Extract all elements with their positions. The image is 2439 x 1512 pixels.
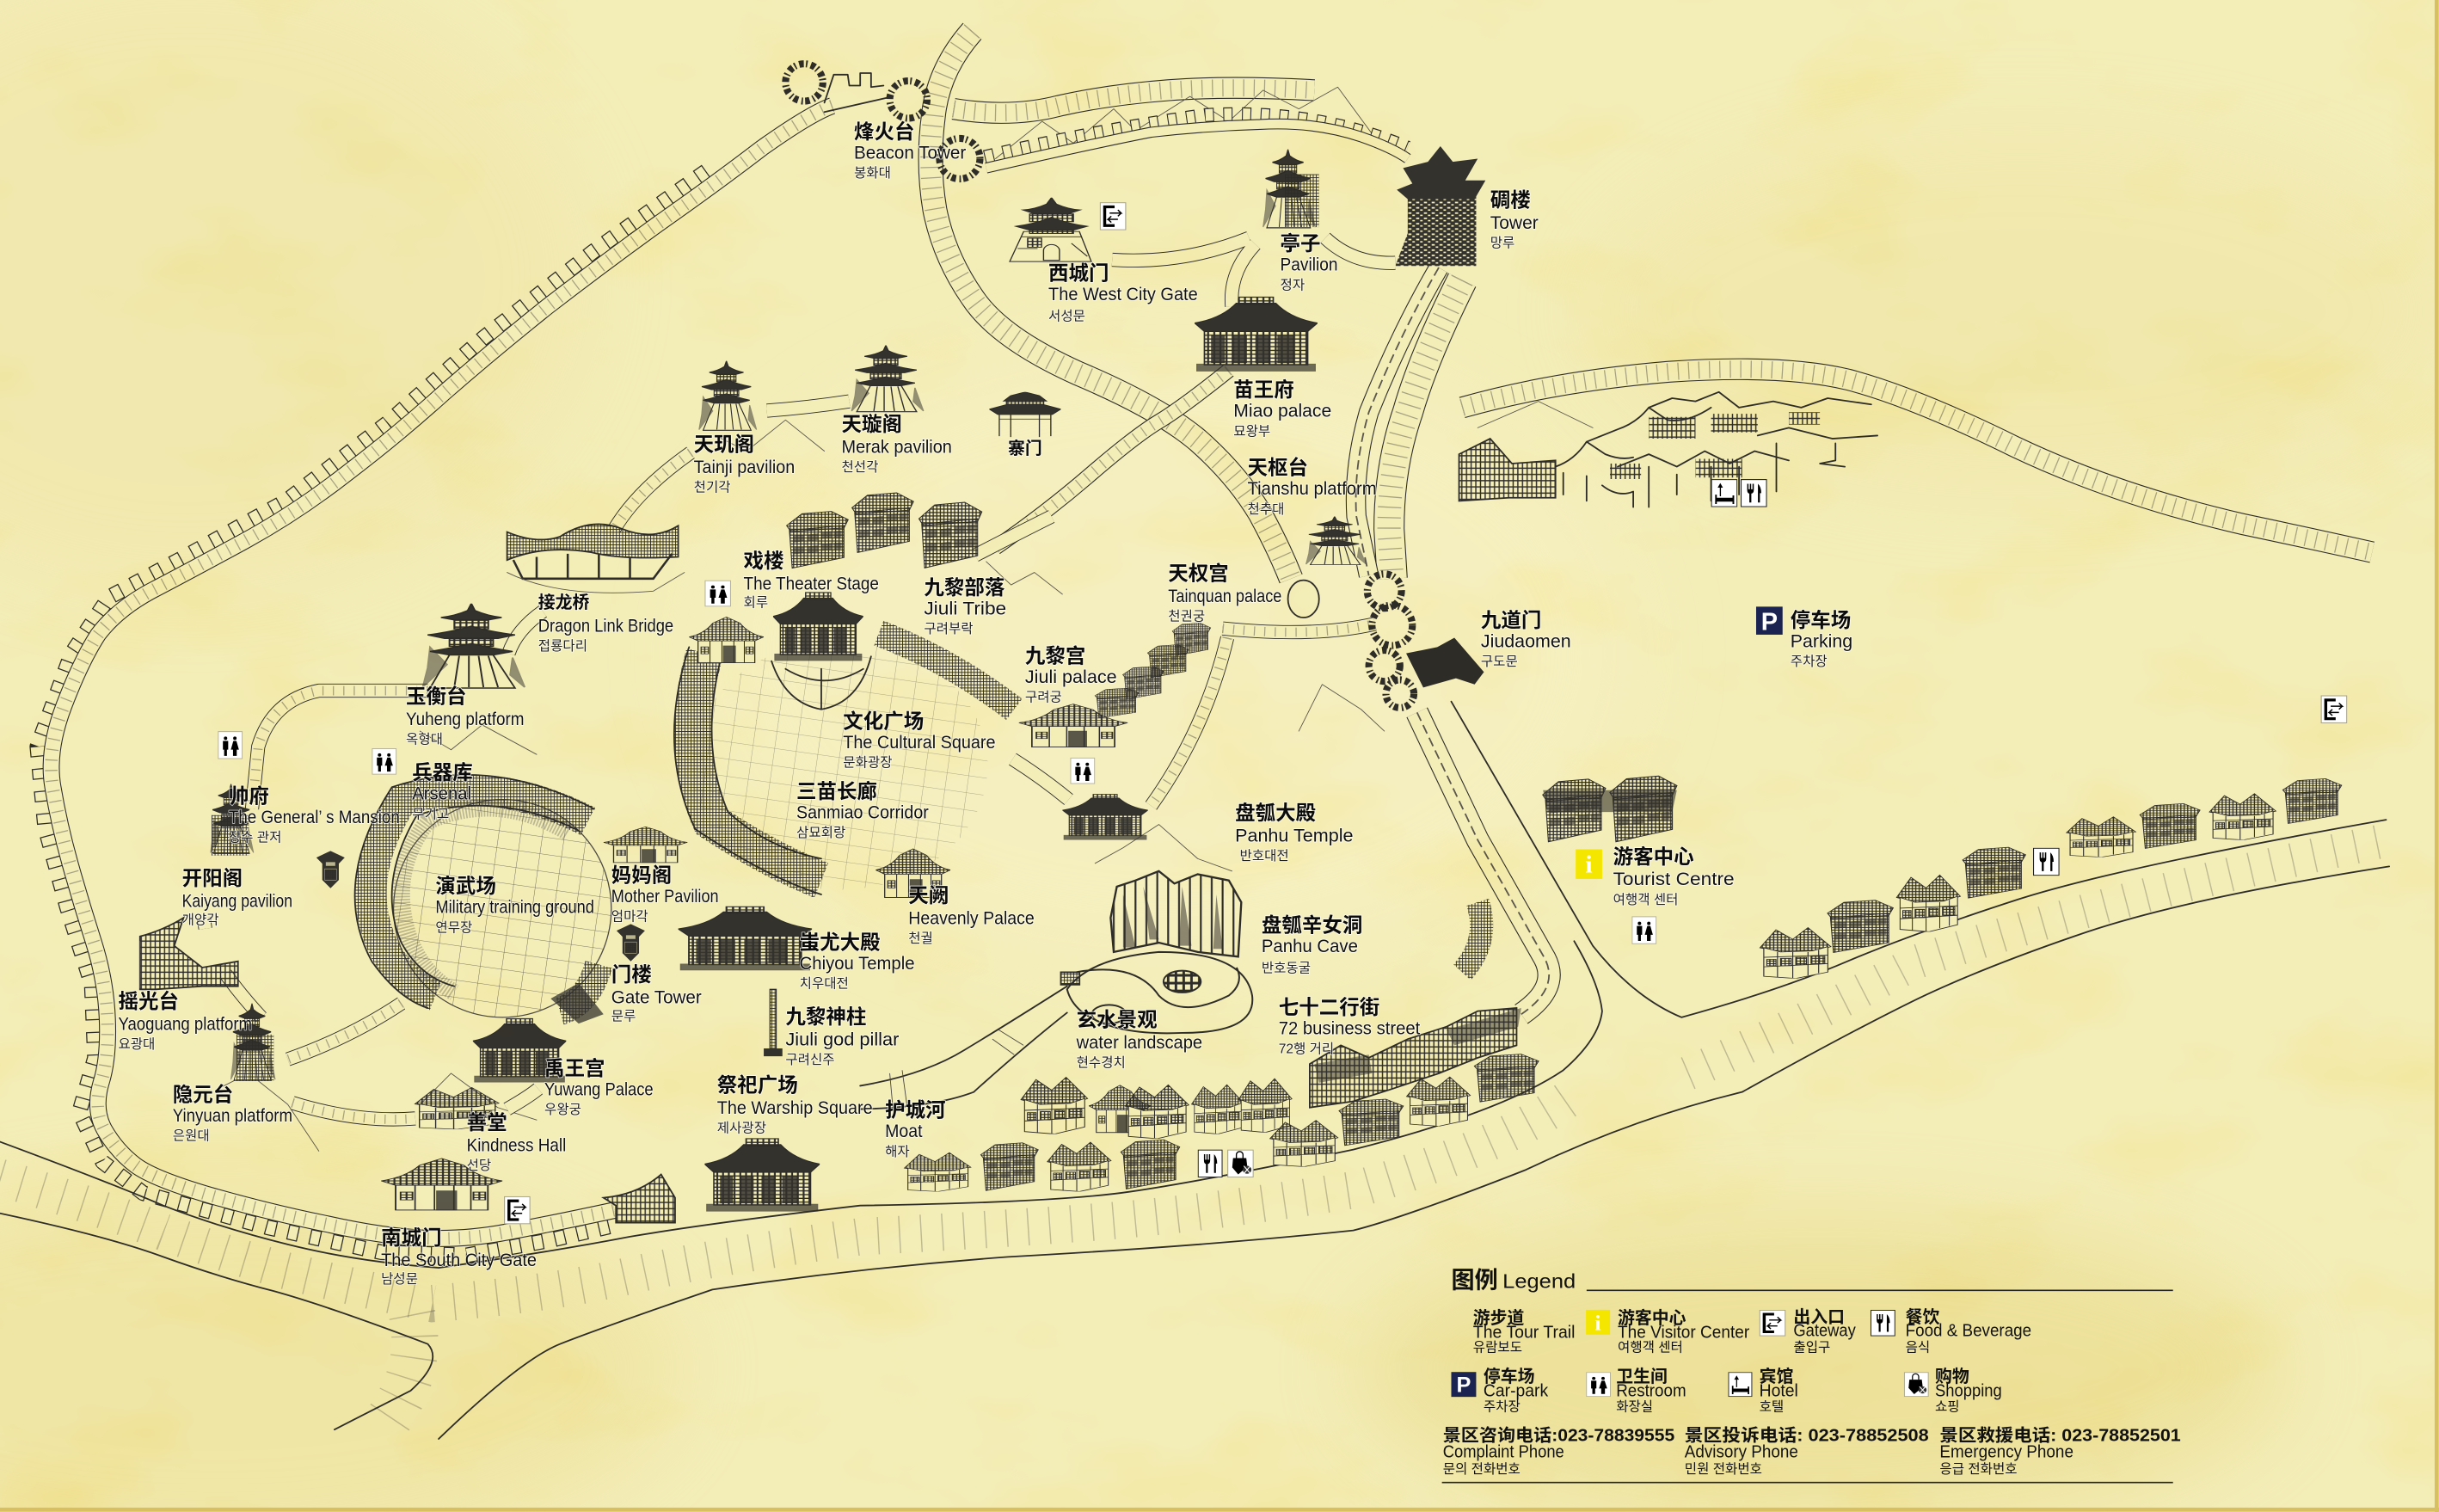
label: miao palace: 묘왕부 xyxy=(1233,423,1270,439)
east road xyxy=(1462,369,2372,552)
label: warship square xyxy=(717,1074,873,1136)
label: heavenly palace: 천궐 xyxy=(908,931,933,946)
label: jiudaomen xyxy=(1481,609,1571,669)
label: dragon link bridge: 접룡다리 xyxy=(538,638,587,654)
label: arsenal: 무기고 xyxy=(412,806,449,821)
building: dragon link bridge xyxy=(507,524,685,593)
legend: food and beverage: Food & Beverage xyxy=(1906,1322,2031,1341)
icon: restroom general's mansion xyxy=(218,732,243,759)
icon: parking: P xyxy=(1761,609,1778,636)
legend: car park: 停车场 xyxy=(1484,1367,1535,1386)
building: pavilion xyxy=(1263,150,1319,228)
label: military training ground: 演武场 xyxy=(435,875,496,897)
label: tower: 碉楼 xyxy=(1490,189,1531,212)
label: yaoguang platform: 요광대 xyxy=(118,1036,155,1052)
label: jiudaomen: Jiudaomen xyxy=(1481,631,1571,651)
building: west city gate xyxy=(1010,198,1091,261)
legend: gateway: Gateway xyxy=(1793,1322,1856,1341)
label: general's mansion: 장수 관저 xyxy=(229,829,281,845)
label: yuwang palace xyxy=(544,1057,654,1117)
label: yuheng platform xyxy=(406,685,525,747)
label: jiuli god pillar: Jiuli god pillar xyxy=(785,1030,899,1049)
jiudaomen tree cluster xyxy=(1367,574,1484,708)
phone: complaint: 문의 전화번호 xyxy=(1443,1461,1521,1477)
legend: food and beverage: 餐饮 xyxy=(1906,1308,1940,1327)
village sketch xyxy=(1478,392,1877,507)
label: military training ground: Military training ground xyxy=(435,898,594,918)
label: cultural square: 문화광장 xyxy=(843,755,893,771)
label: jiuli god pillar: 구려신주 xyxy=(785,1052,835,1067)
label: jiuli tribe xyxy=(924,576,1006,636)
label: tower: 망루 xyxy=(1490,236,1514,251)
building: yuwang palace xyxy=(473,1018,566,1082)
icon: food moat xyxy=(1198,1150,1222,1177)
arc building xyxy=(1462,902,1482,972)
label: tainji pavilion: Tainji pavilion xyxy=(694,458,795,477)
label: military training ground: 연무장 xyxy=(435,919,472,935)
label: kaiyang pavilion: 开阳阁 xyxy=(182,867,243,889)
building: mother pavilion xyxy=(604,827,687,863)
label: warship square: The Warship Square xyxy=(717,1098,873,1118)
mountains behind north wall xyxy=(218,87,1385,1151)
training ground steps xyxy=(402,808,568,993)
label: tainquan palace: Tainquan palace xyxy=(1168,587,1281,606)
phone: complaint xyxy=(1443,1426,1674,1477)
label: pavilion xyxy=(1281,231,1337,292)
label: west city gate xyxy=(1048,261,1198,324)
label: merak pavilion: Merak pavilion xyxy=(841,437,952,457)
military training ground xyxy=(394,800,611,1017)
label: heavenly palace xyxy=(908,884,1035,946)
label: yinyuan platform xyxy=(173,1083,292,1144)
label: mother pavilion: Mother Pavilion xyxy=(611,887,719,907)
pond pavilion xyxy=(1061,972,1079,985)
label: tainquan palace xyxy=(1168,562,1281,624)
label: tianshu platform xyxy=(1248,456,1377,517)
icon: food village xyxy=(1741,480,1766,507)
label: sanmiao corridor: 三苗长廊 xyxy=(796,780,877,802)
building: fortified tower xyxy=(1395,146,1485,266)
label: panhu temple: Panhu Temple xyxy=(1235,826,1354,845)
icon: visitor information: i xyxy=(1586,851,1593,879)
label: jiuli tribe: Jiuli Tribe xyxy=(924,599,1006,618)
label: arsenal xyxy=(412,761,473,821)
house row three xyxy=(1270,1054,1539,1166)
house row two xyxy=(905,1140,1180,1191)
label: gate tower: Gate Tower xyxy=(611,988,702,1008)
label: kindness hall: 선당 xyxy=(467,1158,491,1173)
label: yinyuan platform: 은원대 xyxy=(173,1128,210,1144)
label: merak pavilion: 천선각 xyxy=(841,459,878,475)
label: panhu temple: 盘瓠大殿 xyxy=(1235,802,1316,824)
label: parking: 주차장 xyxy=(1791,654,1828,669)
label: water landscape: water landscape xyxy=(1076,1033,1202,1053)
legend heading: 图例 xyxy=(1451,1267,1498,1294)
legend: visitor center: The Visitor Center xyxy=(1618,1323,1750,1342)
label: chiyou temple xyxy=(800,931,915,991)
seventy-two business street xyxy=(1310,1008,1521,1108)
corridor ring right arc xyxy=(879,633,1014,710)
label: dragon link bridge: 接龙桥 xyxy=(538,593,590,612)
label: water landscape xyxy=(1076,1009,1202,1071)
label: 72 business street: 72 business street xyxy=(1279,1019,1420,1039)
legend: restroom: Restroom xyxy=(1616,1381,1686,1400)
phone: advisory: 景区投诉电话: 023-78852508 xyxy=(1685,1427,1929,1446)
label: tainquan palace: 天权宫 xyxy=(1168,562,1229,585)
label: moat xyxy=(885,1098,946,1159)
icon: visitor information xyxy=(1576,850,1602,879)
building: kaiyang pavilion xyxy=(140,918,238,989)
label: gate tower: 문루 xyxy=(611,1009,636,1023)
corridor ring left outlines xyxy=(674,647,821,894)
label: water landscape: 현수경치 xyxy=(1077,1055,1126,1071)
label: yuheng platform: Yuheng platform xyxy=(406,710,525,729)
label: dragon link bridge: Dragon Link Bridge xyxy=(538,616,673,636)
east house row xyxy=(1760,778,2342,979)
label: tourist centre: Tourist Centre xyxy=(1613,870,1735,889)
phone: emergency: 응급 전화번호 xyxy=(1939,1461,2018,1477)
label: moat: Moat xyxy=(885,1122,923,1141)
house row one xyxy=(1021,1078,1292,1139)
label: miao palace xyxy=(1233,378,1331,439)
building: kindness hall xyxy=(415,1087,499,1129)
label: moat: 护城河 xyxy=(885,1098,946,1122)
label: west city gate: 西城门 xyxy=(1048,261,1109,285)
label: tianshu platform: Tianshu platform xyxy=(1248,479,1377,499)
label: parking: Parking xyxy=(1791,631,1852,651)
legend: visitor center: 游客中心 xyxy=(1618,1308,1686,1328)
icon: shopping moat xyxy=(1228,1150,1253,1177)
icon: gateway west xyxy=(1100,203,1126,230)
building: south side hall xyxy=(381,1159,502,1210)
legend: tour trail xyxy=(1473,1308,1575,1355)
label: yuwang palace: 禹王宫 xyxy=(544,1057,605,1079)
label: kaiyang pavilion: 개양각 xyxy=(182,912,219,927)
building: yuheng platform xyxy=(423,604,525,688)
legend: restroom: 卫生间 xyxy=(1616,1368,1668,1386)
turret near gate tower xyxy=(617,924,645,962)
building: jiuli palace steps xyxy=(1095,623,1211,718)
legend: gateway xyxy=(1760,1308,1856,1355)
phone: emergency: Emergency Phone xyxy=(1939,1443,2073,1462)
label: sanmiao corridor xyxy=(796,780,929,840)
label: cultural square: The Cultural Square xyxy=(843,733,996,753)
jiuli god pillar xyxy=(764,989,783,1056)
tianshu platform pagoda xyxy=(1306,516,1366,565)
northwest and south city wall xyxy=(37,106,832,1256)
label: dragon link bridge xyxy=(538,593,673,654)
label: jiuli palace: 九黎宫 xyxy=(1025,644,1085,667)
building: miao palace xyxy=(1195,297,1318,371)
label: beacon tower: 烽火台 xyxy=(854,120,914,143)
label: parking xyxy=(1791,609,1852,669)
label: yuheng platform: 玉衡台 xyxy=(406,685,467,708)
label: parking: 停车场 xyxy=(1791,609,1851,631)
label: pavilion: 정자 xyxy=(1281,277,1305,292)
label: tianshu platform: 天枢台 xyxy=(1248,456,1308,479)
label: kindness hall: Kindness Hall xyxy=(467,1135,566,1155)
label: merak pavilion: 天璇阁 xyxy=(841,413,902,435)
phone: complaint: Complaint Phone xyxy=(1443,1443,1564,1462)
building: jiuli palace base xyxy=(1019,704,1127,747)
legend: food and beverage xyxy=(1871,1308,2031,1355)
label: south city gate: 남성문 xyxy=(381,1271,418,1287)
label: theater stage: 회루 xyxy=(744,594,768,610)
icon: restroom jiuli palace xyxy=(1071,758,1095,784)
beacon wall segment xyxy=(825,73,893,112)
label: chiyou temple: Chiyou Temple xyxy=(800,954,914,974)
label: jiudaomen: 구도문 xyxy=(1481,655,1518,669)
label: kaiyang pavilion: Kaiyang pavilion xyxy=(182,891,292,911)
legend: car park: Car-park xyxy=(1484,1381,1548,1400)
building: gate tower xyxy=(550,964,604,1023)
label: tainji pavilion xyxy=(694,433,795,495)
phone: emergency: 景区救援电话: 023-78852501 xyxy=(1939,1427,2181,1446)
label: chiyou temple: 蚩尤大殿 xyxy=(800,931,881,953)
label: tower: Tower xyxy=(1490,213,1539,233)
label: arsenal: 兵器库 xyxy=(412,761,473,784)
label: yinyuan platform: 隐元台 xyxy=(173,1083,233,1106)
building: panhu temple xyxy=(1062,794,1148,839)
label: miao palace: 苗王府 xyxy=(1233,378,1294,401)
building: merak pavilion xyxy=(851,346,924,412)
label: tourist centre: 游客中心 xyxy=(1613,845,1694,868)
label: general's mansion: 帅府 xyxy=(229,784,269,807)
label: yinyuan platform: Yinyuan platform xyxy=(173,1106,292,1126)
label: cultural square xyxy=(843,709,996,771)
label: panhu cave: 반호동굴 xyxy=(1262,960,1311,975)
icon: gateway east xyxy=(2321,696,2347,722)
label: jiuli palace: 구려궁 xyxy=(1025,690,1062,705)
label: south city gate xyxy=(381,1226,537,1287)
label: moat: 해자 xyxy=(885,1144,910,1159)
label: sanmiao corridor: Sanmiao Corridor xyxy=(796,802,929,822)
icon: hotel village xyxy=(1711,480,1737,507)
legend panel xyxy=(1442,1267,2181,1483)
wide moat road band xyxy=(0,702,2389,1439)
label: kindness hall xyxy=(467,1111,566,1173)
label: sanmiao corridor: 삼묘회랑 xyxy=(796,825,845,840)
label: beacon tower: Beacon Tower xyxy=(854,143,966,163)
label: jiudaomen: 九道门 xyxy=(1481,609,1541,631)
icon: restroom arsenal xyxy=(372,748,396,774)
building: corner temple xyxy=(604,1175,675,1223)
building: chiyou temple xyxy=(679,907,812,970)
label: tower xyxy=(1490,189,1539,251)
north city wall xyxy=(985,114,1408,168)
label: yuwang palace: 우왕궁 xyxy=(544,1102,581,1117)
label: yuwang palace: Yuwang Palace xyxy=(544,1079,654,1099)
building: yinyuan pagoda xyxy=(230,1004,275,1081)
north road xyxy=(954,88,1314,113)
label: tianshu platform: 천추대 xyxy=(1248,501,1284,517)
label: beacon tower: 봉화대 xyxy=(854,165,891,181)
label: miao palace: Miao palace xyxy=(1233,402,1331,421)
legend heading xyxy=(1451,1267,2173,1294)
legend: gateway: 출입구 xyxy=(1793,1340,1830,1355)
label: panhu cave xyxy=(1262,913,1362,975)
label: warship square: 祭祀广场 xyxy=(717,1074,798,1097)
label: beacon tower xyxy=(854,120,966,181)
legend: hotel: 호텔 xyxy=(1760,1398,1784,1414)
corridor ring left arc xyxy=(693,654,821,881)
legend: shopping xyxy=(1904,1368,2002,1414)
label: panhu cave: Panhu Cave xyxy=(1262,937,1358,956)
phone: complaint: 景区咨询电话:023-78839555 xyxy=(1443,1426,1674,1446)
rock formation xyxy=(1110,871,1241,956)
legend: tour trail: The Tour Trail xyxy=(1473,1323,1575,1342)
label: heavenly palace: Heavenly Palace xyxy=(908,908,1035,928)
legend: car park xyxy=(1451,1367,1548,1414)
icon: food east xyxy=(2034,848,2059,876)
label: kindness hall: 善堂 xyxy=(467,1111,507,1134)
legend: visitor center xyxy=(1586,1308,1750,1355)
label: tainquan palace: 천권궁 xyxy=(1168,609,1205,624)
label: west city gate: 서성문 xyxy=(1048,309,1085,324)
label: jiuli tribe: 구려부락 xyxy=(924,621,974,636)
legend: visitor center: i xyxy=(1595,1311,1601,1335)
phone: advisory: Advisory Phone xyxy=(1685,1443,1798,1462)
crossing road xyxy=(996,370,1229,548)
legend: food and beverage: 음식 xyxy=(1906,1340,1930,1355)
label: west city gate: The West City Gate xyxy=(1048,285,1198,304)
legend: restroom xyxy=(1587,1368,1686,1414)
label: jiuli god pillar xyxy=(785,1005,899,1067)
building: stockade gate xyxy=(989,392,1061,437)
label: tainji pavilion: 天玑阁 xyxy=(694,433,754,456)
label: gate tower: 门楼 xyxy=(611,963,652,986)
label: tourist centre: 여행객 센터 xyxy=(1613,892,1678,907)
phone: advisory: 민원 전화번호 xyxy=(1685,1461,1762,1477)
label: kaiyang pavilion xyxy=(182,867,292,927)
east wall bands xyxy=(1356,267,1549,1014)
building: heavenly palace xyxy=(875,849,950,898)
label: mother pavilion xyxy=(611,864,719,925)
phone: advisory xyxy=(1685,1427,1929,1477)
label: yaoguang platform: 摇光台 xyxy=(118,989,179,1012)
label: stockade gate: 寨门 xyxy=(1008,439,1042,458)
label: yaoguang platform: Yaoguang platform xyxy=(118,1014,252,1034)
legend: restroom: 화장실 xyxy=(1616,1398,1653,1414)
labels xyxy=(118,120,1852,1287)
legend: hotel xyxy=(1729,1367,1798,1414)
legend: car park: P xyxy=(1457,1374,1471,1398)
icon: restroom tourist centre xyxy=(1632,917,1656,943)
legend: hotel: 宾馆 xyxy=(1760,1367,1793,1386)
label: mother pavilion: 엄마각 xyxy=(611,909,648,925)
label: merak pavilion xyxy=(841,413,952,475)
label: jiuli palace: Jiuli palace xyxy=(1025,667,1117,687)
label: theater stage: The Theater Stage xyxy=(744,574,879,593)
legend: car park: 주차장 xyxy=(1484,1398,1521,1414)
label: yaoguang platform xyxy=(118,989,252,1052)
label: pavilion: Pavilion xyxy=(1281,255,1337,275)
central winding road xyxy=(931,31,1291,579)
icon: parking xyxy=(1756,606,1783,636)
building: worship square hall xyxy=(704,1139,820,1211)
label: jiuli palace xyxy=(1025,644,1117,705)
legend: tour trail: 游步道 xyxy=(1473,1308,1525,1328)
theater boat platform xyxy=(771,656,871,710)
turret near general's mansion xyxy=(316,851,345,888)
label: 72 business street xyxy=(1279,996,1420,1056)
label: panhu temple xyxy=(1235,802,1354,864)
building: tainji pavilion xyxy=(699,361,757,430)
label: panhu temple: 반호대전 xyxy=(1240,848,1289,864)
label: mother pavilion: 妈妈阁 xyxy=(611,864,672,886)
beacon trees xyxy=(785,64,980,179)
cultural square ground xyxy=(692,641,988,890)
label: 72 business street: 72행 거리 xyxy=(1279,1041,1334,1056)
phone: emergency xyxy=(1939,1427,2181,1477)
label: water landscape: 玄水景观 xyxy=(1077,1009,1158,1031)
label: heavenly palace: 天阙 xyxy=(908,884,949,907)
label: military training ground xyxy=(435,875,594,935)
label: tourist centre xyxy=(1613,845,1735,907)
legend: shopping: 쇼핑 xyxy=(1935,1398,1960,1414)
label: panhu cave: 盘瓠辛女洞 xyxy=(1262,913,1362,936)
label: 72 business street: 七十二行街 xyxy=(1279,996,1379,1018)
building: jiuli tribe complex xyxy=(787,493,982,569)
legend: shopping: 购物 xyxy=(1935,1368,1969,1386)
legend heading: Legend xyxy=(1502,1270,1576,1293)
building: theater stage xyxy=(773,593,863,661)
icon: restroom theater xyxy=(705,581,731,606)
label: arsenal: Arsenal xyxy=(412,784,471,804)
loop at road end xyxy=(1288,581,1319,618)
legend: tour trail: 유람보도 xyxy=(1473,1340,1522,1355)
yin yang pond xyxy=(1067,952,1252,1033)
building: ring gate left xyxy=(689,617,764,663)
tourist centre building xyxy=(1543,776,1677,842)
building: general's mansion xyxy=(211,784,254,856)
label: jiuli tribe: 九黎部落 xyxy=(924,576,1005,599)
icon: gateway south xyxy=(505,1196,530,1224)
label: warship square: 제사광장 xyxy=(717,1121,766,1136)
legend: visitor center: 여행객 센터 xyxy=(1618,1340,1683,1355)
label: theater stage xyxy=(744,550,879,610)
training ground corridor xyxy=(371,790,588,996)
label: general's mansion: The General’ s Mansion xyxy=(229,808,400,827)
label: theater stage: 戏楼 xyxy=(744,550,784,572)
label: south city gate: The South City Gate xyxy=(381,1251,537,1270)
label: cultural square: 文化广场 xyxy=(843,709,924,732)
village left hall xyxy=(1459,439,1556,501)
legend: hotel: Hotel xyxy=(1760,1381,1798,1400)
label: tainji pavilion: 천기각 xyxy=(694,480,731,495)
label: pavilion: 亭子 xyxy=(1281,231,1321,255)
legend: gateway: 出入口 xyxy=(1793,1308,1845,1327)
label: yuheng platform: 옥형대 xyxy=(406,732,443,747)
label: jiuli god pillar: 九黎神柱 xyxy=(785,1005,866,1028)
label: general's mansion xyxy=(229,784,400,845)
label: south city gate: 南城门 xyxy=(381,1226,442,1249)
minor paths xyxy=(204,238,1395,1119)
legend: shopping: Shopping xyxy=(1935,1381,2002,1400)
corridor outlines xyxy=(355,775,594,1008)
label: gate tower xyxy=(611,963,702,1023)
label: chiyou temple: 치우대전 xyxy=(800,975,849,991)
